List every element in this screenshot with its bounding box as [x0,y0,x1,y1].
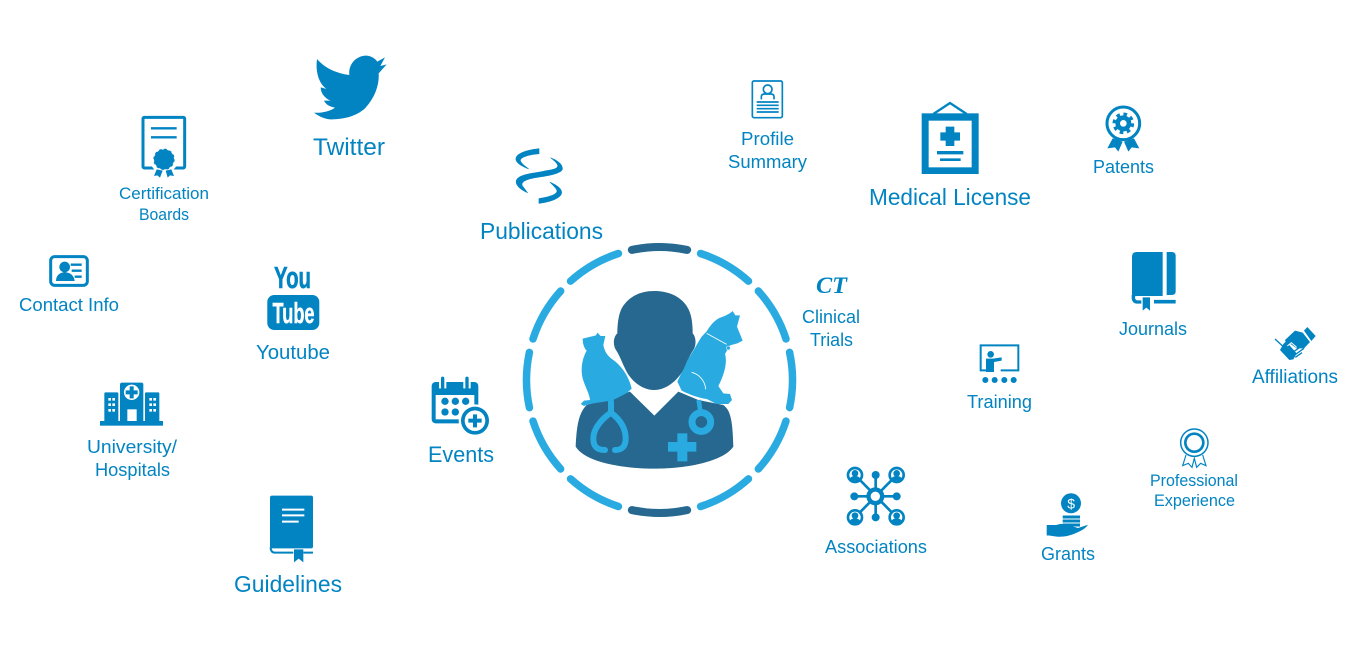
label: Events [428,442,494,467]
right cat [677,311,743,404]
label: Profile [741,129,794,149]
vet figure with cats [576,291,743,469]
item: Journals [1119,252,1187,339]
icon: helix [516,148,563,204]
label: Guidelines [234,571,342,597]
item: Medical License [869,103,1031,210]
label [728,129,807,172]
item: Patents [1093,107,1154,177]
label: Publications [480,218,603,244]
item: Youtube [256,260,330,364]
head [614,291,696,390]
item: University/Hospitals [87,383,177,480]
item: Contact Info [19,257,119,315]
icon: rosette outline [1181,429,1208,467]
label: Youtube [256,342,330,364]
icon: book [270,496,313,562]
icon: youtube logo: Tube [272,298,314,330]
label [802,307,860,350]
item: Twitter [313,56,387,161]
label: Contact Info [19,294,119,315]
item: Publications [480,148,603,244]
label: Medical License [869,184,1031,210]
icon: certificate [143,117,185,178]
item: Guidelines [234,496,342,597]
label: Patents [1093,157,1154,177]
item: Profile Summary [728,81,807,172]
icon: twitter bird [314,56,387,119]
icon: framed license [922,103,979,174]
label [87,437,177,480]
icon: journal book [1132,252,1176,311]
label: Journals [1119,319,1187,339]
collar and haunch lines [692,333,727,389]
item: Grants [1041,493,1095,564]
label: Grants [1041,544,1095,564]
label: Summary [728,152,807,172]
icon: gear rosette [1107,107,1140,152]
icon: youtube logo [267,260,319,330]
icon: youtube logo: You [274,260,311,295]
label: Clinical [802,307,860,327]
item: Events [428,377,494,467]
stethoscope right [699,400,701,413]
icon: calendar plus [432,377,491,437]
label: Associations [825,537,927,557]
label: Affiliations [1252,367,1338,388]
item: Professional Experience [1150,429,1238,510]
icon: id card [51,257,87,285]
icon: profile document [752,81,782,118]
cross [668,433,696,461]
label: Certification [119,185,209,203]
label: University/ [87,437,177,457]
dashed ring [502,222,817,538]
label: Twitter [313,134,385,161]
item: Training [967,345,1032,412]
item: Clinical Trials [802,273,860,350]
label: Hospitals [95,460,170,480]
stethoscope left [593,402,626,450]
icon: hand with coin: $ [1067,496,1075,512]
label [1150,472,1238,510]
item: Affiliations [1252,327,1338,388]
label [119,185,209,224]
icon: hospital [100,383,163,426]
icon: network of people [848,468,904,524]
icon: CT mark: CT [816,273,848,298]
label: Boards [139,206,189,224]
item: Certification Boards [119,117,209,224]
label: Experience [1154,492,1235,510]
body [576,392,733,469]
item: Associations [825,468,927,557]
left cat [581,333,632,406]
icon: handshake [1275,327,1316,360]
central hub: ring and vet [502,222,817,538]
icon: trainer at board [981,345,1018,383]
label: Trials [810,330,853,350]
label: Professional [1150,472,1238,490]
label: Training [967,392,1032,412]
